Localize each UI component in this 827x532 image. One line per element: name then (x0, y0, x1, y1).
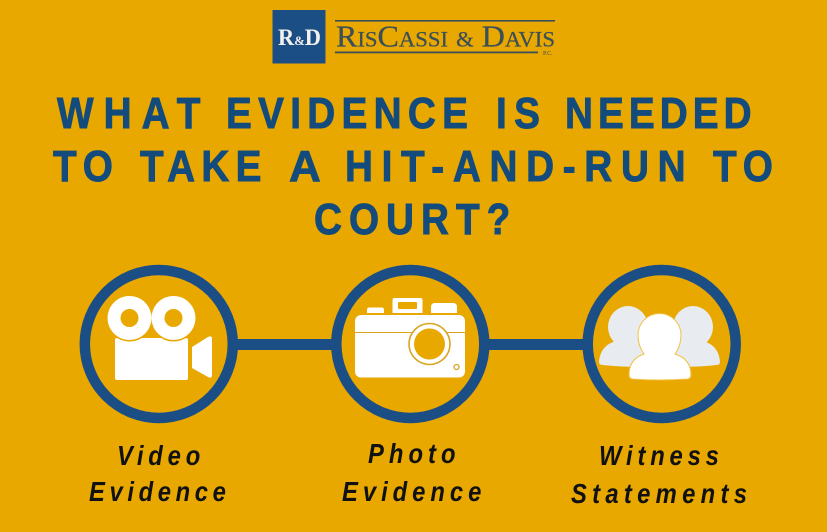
ring (588, 270, 736, 418)
step: witness statements (588, 270, 736, 418)
label: photo evidence: Evidence (342, 475, 481, 507)
connector: video to photo (236, 339, 333, 350)
title: TAKE (140, 141, 261, 191)
label: video evidence: Evidence (89, 475, 226, 507)
icon: video camera (106, 294, 212, 380)
step: photo evidence (336, 270, 484, 418)
ring (85, 270, 233, 418)
label: photo evidence (342, 437, 481, 507)
title: NEEDED (565, 88, 752, 138)
logo wordmark: P.C. (543, 51, 553, 57)
logo wordmark: RISCASSI & DAVIS (336, 18, 555, 54)
label: photo evidence: Photo (368, 437, 456, 469)
logo (272, 10, 555, 64)
ring (336, 270, 484, 418)
logo mark: R&D (278, 25, 321, 50)
title: TO (53, 141, 113, 191)
label: video evidence (89, 439, 226, 507)
title (53, 88, 773, 244)
connector: photo to witness (487, 339, 585, 350)
title: TO (713, 141, 773, 191)
title: COURT? (314, 194, 510, 244)
icon: camera (355, 298, 465, 378)
label: witness statements (571, 439, 747, 509)
logo mark (272, 10, 326, 64)
title: WHAT (57, 88, 200, 138)
label: witness statements: Statements (571, 477, 747, 509)
title: A (289, 142, 321, 191)
step: video evidence (85, 270, 233, 418)
icon: people (599, 306, 720, 380)
title: HIT-AND-RUN (345, 141, 686, 191)
title: EVIDENCE (226, 88, 468, 138)
title: IS (496, 88, 540, 138)
label: witness statements: Witness (599, 439, 719, 471)
label: video evidence: Video (117, 439, 200, 471)
